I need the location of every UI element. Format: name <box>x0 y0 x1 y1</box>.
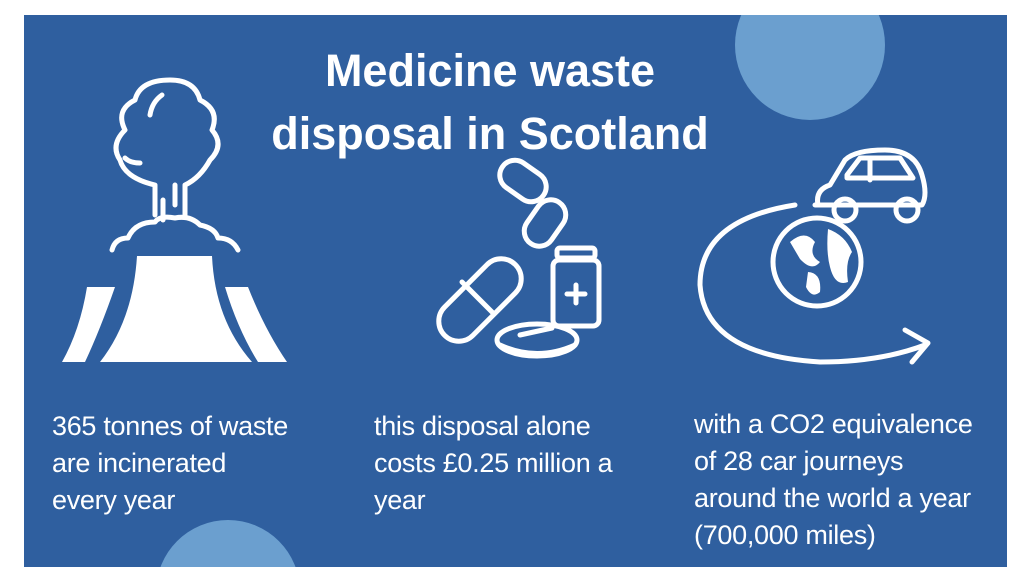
text: cost: this disposal alone <box>374 411 590 441</box>
text: incineration <box>52 411 288 515</box>
text: CO2: (700,000 miles) <box>694 520 876 550</box>
text: cost: year <box>374 485 425 515</box>
text: incineration: 365 tonnes of waste <box>52 411 288 441</box>
text: incineration: are incinerated <box>52 448 226 478</box>
text: cost <box>374 411 613 515</box>
text: CO2 <box>694 409 973 550</box>
text: CO2: with a CO2 equivalence <box>694 409 973 439</box>
title: disposal in Scotland <box>271 108 709 159</box>
title <box>271 45 709 159</box>
text: CO2: of 28 car journeys <box>694 446 903 476</box>
text: incineration: every year <box>52 485 175 515</box>
text: cost: costs £0.25 million a <box>374 448 612 478</box>
decorative circle bottom <box>156 520 300 584</box>
text: CO2: around the world a year <box>694 483 971 513</box>
decorative circle top <box>735 0 885 120</box>
title: Medicine waste <box>325 45 655 96</box>
